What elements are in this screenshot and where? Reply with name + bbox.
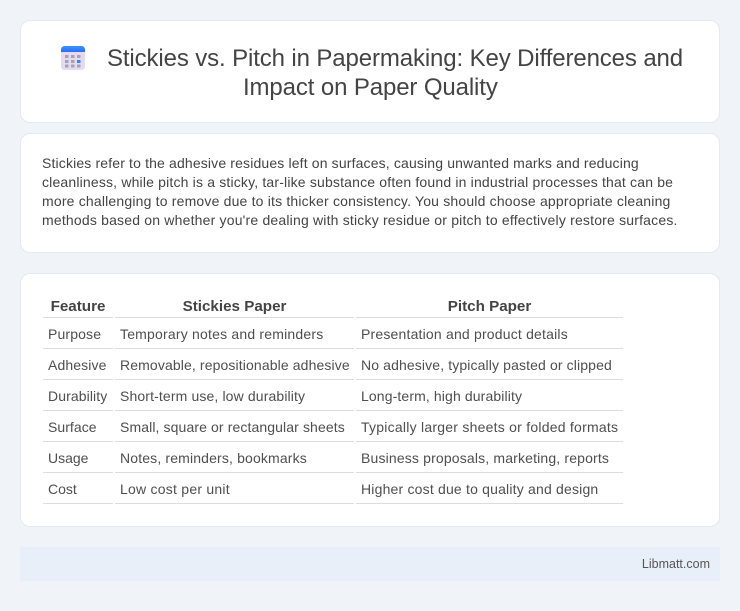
row: cost: Low cost per unit [120,481,230,497]
row: cost: Cost [48,481,77,497]
row: adhesive: Adhesive [48,357,107,373]
row: purpose [48,326,568,342]
row: adhesive: No adhesive, typically pasted or clipped [361,357,612,373]
row: durability: Long-term, high durability [361,388,522,404]
row: usage: Notes, reminders, bookmarks [120,450,307,466]
table header row: Stickies Paper [183,298,286,315]
row: purpose: Presentation and product details [361,326,568,342]
row: purpose: Temporary notes and reminders [120,326,323,342]
table header row [51,298,532,315]
intro text: methods based on whether you're dealing with sticky residue or pitch to effectively restore surfaces. [42,212,678,228]
row: surface [48,419,618,435]
row: surface: Surface [48,419,97,435]
row: cost [48,481,598,497]
row: purpose: Purpose [48,326,101,342]
intro text [42,155,678,228]
footer bar [20,547,720,581]
intro text: more challenging to remove due to its thicker consistency. You should choose appropriate cleaning [42,193,671,209]
footer credit: Libmatt.com [642,557,710,571]
icon: calendar [61,46,85,70]
title [107,45,683,101]
panel: intro card [20,133,720,253]
row: durability: Short-term use, low durability [120,388,305,404]
intro text: cleanliness, while pitch is a sticky, tar-like substance often found in industrial processes that can be [42,174,673,190]
panel: comparison table card [20,273,720,527]
table header row: Feature [51,298,105,315]
comparison table [43,298,623,504]
intro text: Stickies refer to the adhesive residues left on surfaces, causing unwanted marks and reducing [42,155,639,171]
row: usage: Usage [48,450,88,466]
row: durability: Durability [48,388,107,404]
title: Impact on Paper Quality [243,74,498,101]
row: cost: Higher cost due to quality and design [361,481,598,497]
title: Stickies vs. Pitch in Papermaking: Key Differences and [107,45,683,72]
row: usage [48,450,609,466]
table header row: Pitch Paper [448,298,531,315]
panel: title card [20,20,720,123]
row: surface: Typically larger sheets or folded formats [361,419,618,435]
row: adhesive: Removable, repositionable adhesive [120,357,350,373]
row: adhesive [48,357,612,373]
row: usage: Business proposals, marketing, reports [361,450,609,466]
row: surface: Small, square or rectangular sheets [120,419,345,435]
row: durability [48,388,522,404]
